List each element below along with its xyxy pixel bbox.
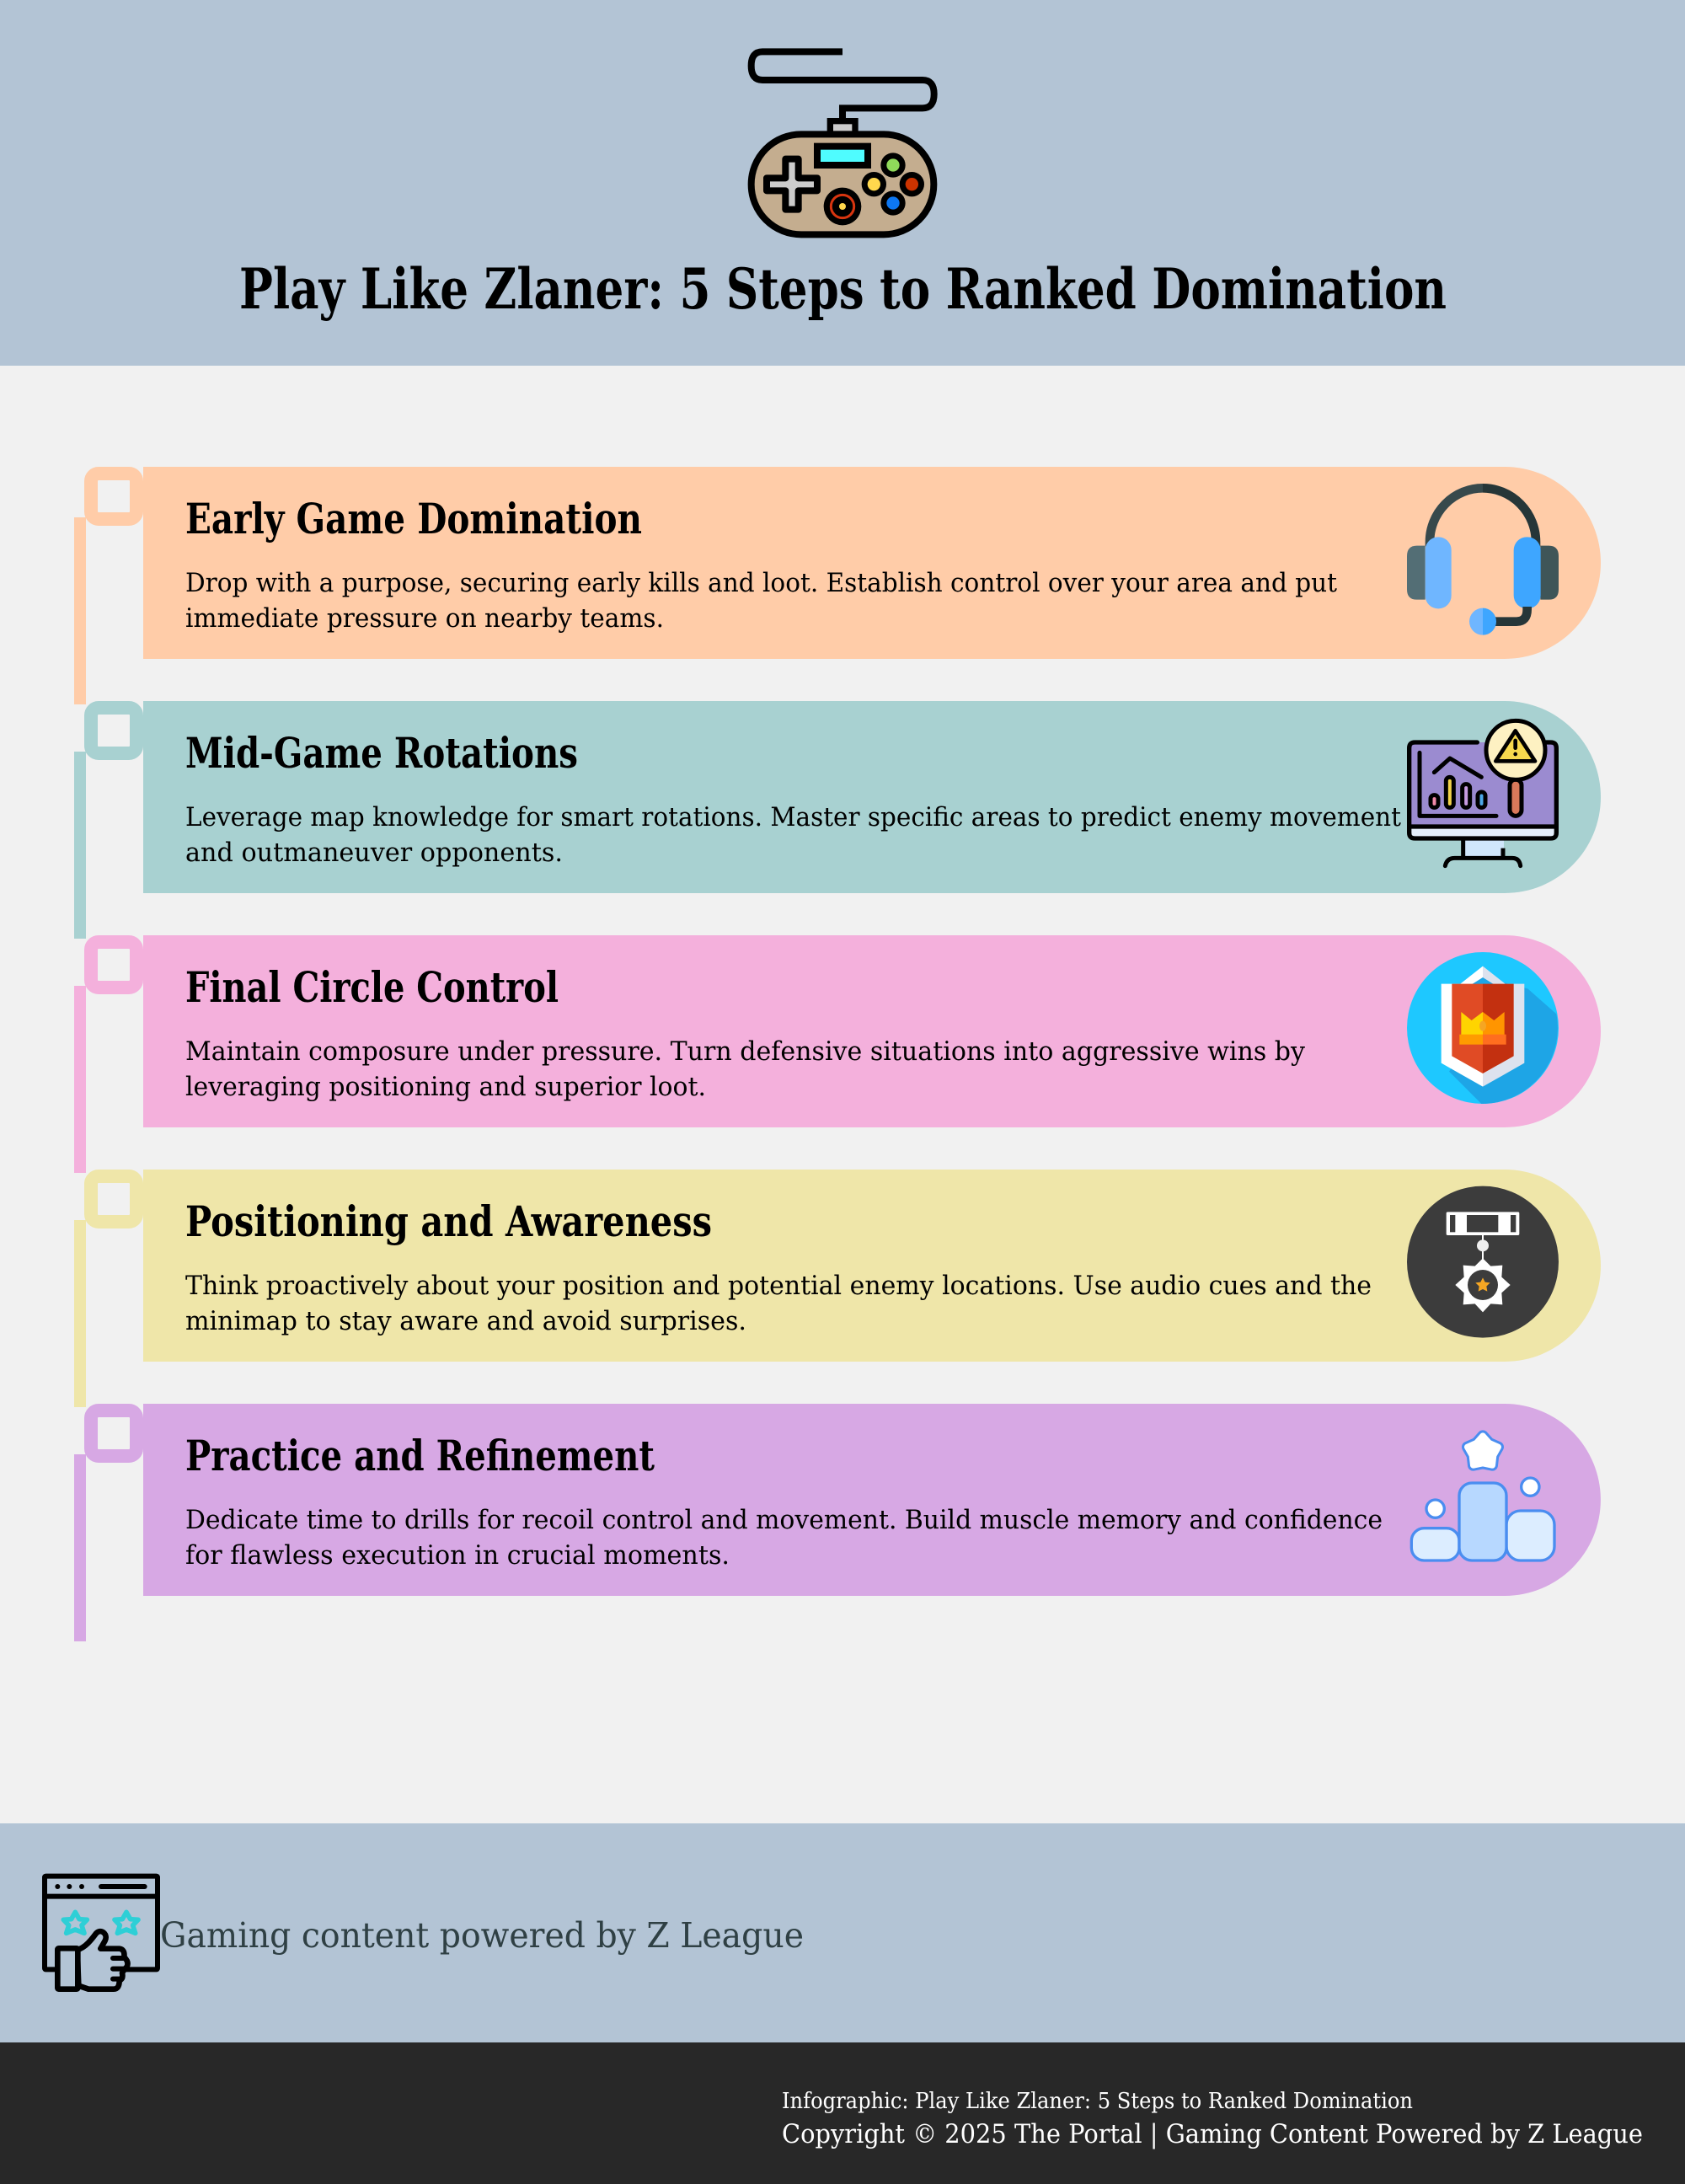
panel: step 3 final circle control xyxy=(74,935,1601,1173)
text block: mid-game description: and outmaneuver opponents. xyxy=(185,838,563,868)
heading: final circle control: Final Circle Control xyxy=(185,962,559,1012)
text block: final circle description: leveraging positioning and superior loot. xyxy=(185,1072,706,1102)
text block: positioning description: Think proactively about your position and potential enemy locations. Use audio cues and the xyxy=(185,1271,1372,1301)
text block: mid-game description xyxy=(185,802,1402,868)
text block: mid-game description: Leverage map knowledge for smart rotations. Master specific areas to predict enemy movement xyxy=(185,802,1402,832)
text block: early game description: Drop with a purpose, securing early kills and loot. Establish control over your area and put xyxy=(185,568,1338,598)
text block: early game description xyxy=(185,568,1338,634)
text block: practice description: for flawless execution in crucial moments. xyxy=(185,1540,730,1571)
footer band: copyright xyxy=(0,2042,1685,2184)
panel: step 4 positioning and awareness xyxy=(74,1170,1601,1407)
icon: monitor with warning magnifier xyxy=(1410,720,1556,866)
text block: practice description: Dedicate time to drills for recoil control and movement. Build muscle memory and confidence xyxy=(185,1505,1383,1535)
text block: early game description: immediate pressure on nearby teams. xyxy=(185,603,664,634)
panel: step 1 early game domination xyxy=(74,467,1601,704)
text block: final circle description: Maintain composure under pressure. Turn defensive situations into aggressive wins by xyxy=(185,1036,1305,1067)
panel: step 5 practice and refinement xyxy=(74,1404,1601,1641)
icon: shield with crown xyxy=(1407,952,1559,1104)
sponsor text: Gaming content powered by Z League xyxy=(160,1915,804,1956)
text block: practice description xyxy=(185,1505,1383,1571)
heading: positioning and awareness: Positioning and Awareness xyxy=(185,1196,712,1246)
heading: early game domination: Early Game Domination xyxy=(185,494,642,543)
icon: headset xyxy=(1407,488,1559,635)
icon: game controller xyxy=(752,51,934,234)
icon: review window with thumbs up xyxy=(45,1876,158,1989)
text block: final circle description xyxy=(185,1036,1305,1102)
icon: medal xyxy=(1407,1186,1559,1338)
text block: positioning description xyxy=(185,1271,1372,1336)
heading: practice and refinement: Practice and Refinement xyxy=(185,1431,655,1480)
copyright line: Copyright © 2025 The Portal | Gaming Content Powered by Z League xyxy=(782,2119,1643,2149)
footer band: sponsor xyxy=(0,1823,1685,2042)
heading: mid-game rotations: Mid-Game Rotations xyxy=(185,728,578,778)
header band xyxy=(0,0,1685,366)
text block: positioning description: minimap to stay aware and avoid surprises. xyxy=(185,1306,746,1336)
footer source line: Infographic: Play Like Zlaner: 5 Steps to Ranked Domination xyxy=(782,2089,1413,2114)
icon: podium with star xyxy=(1411,1436,1554,1560)
panel: step 2 mid-game rotations xyxy=(74,701,1601,939)
